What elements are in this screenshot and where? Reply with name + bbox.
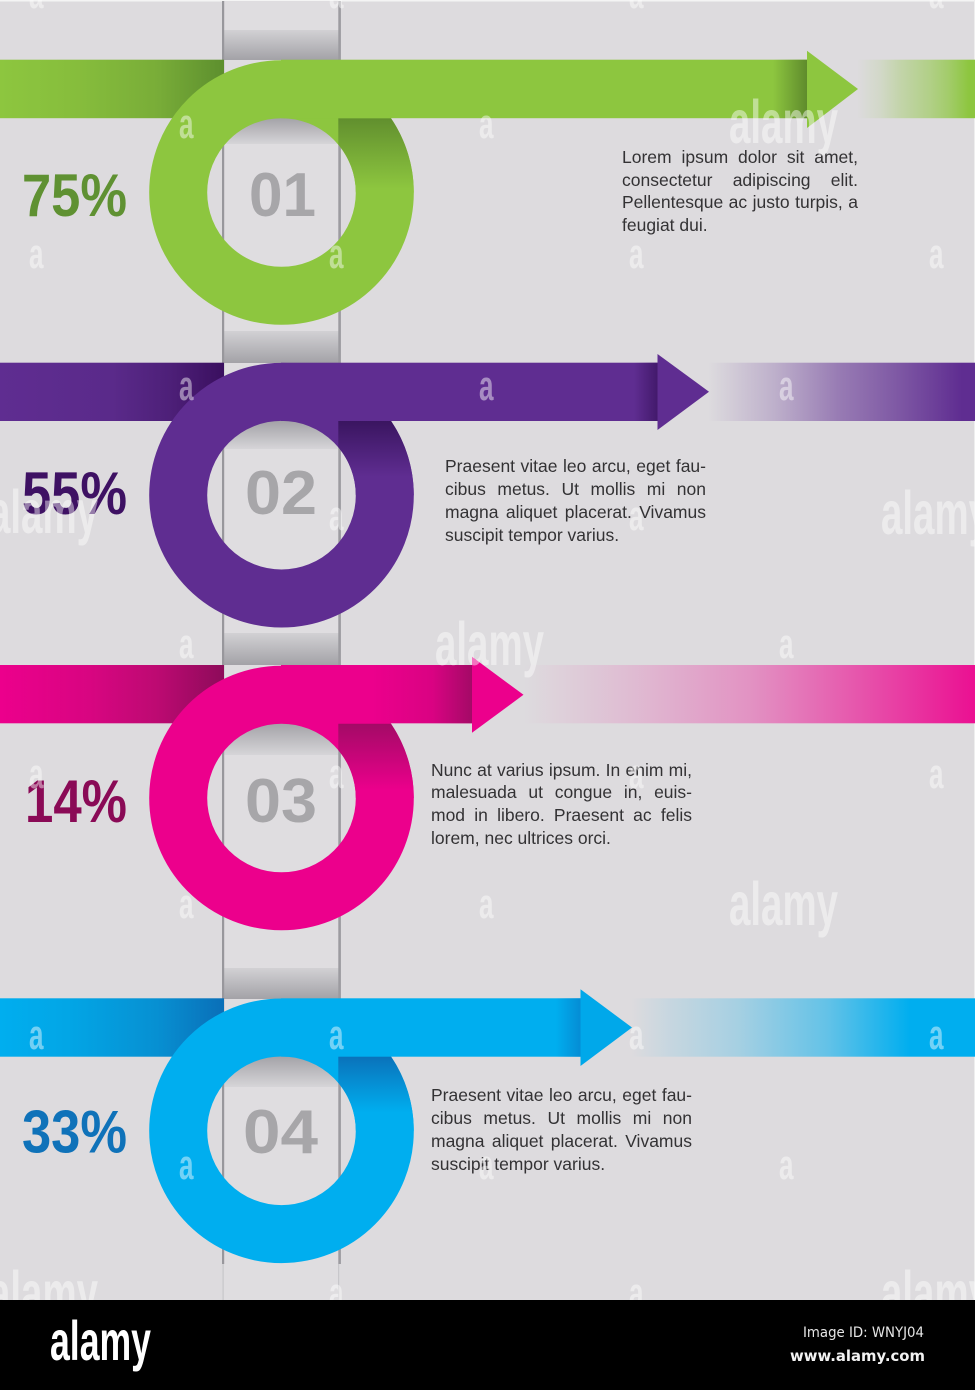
section 02: purple ring arrow — [0, 354, 975, 598]
watermarks: a — [179, 100, 194, 147]
watermarks: a — [929, 1011, 944, 1058]
image id: Image ID: WNYJ04 — [803, 1325, 924, 1341]
description: lorem, nec ultrices orci. — [431, 828, 611, 848]
description: suscipit tempor varius. — [431, 1154, 605, 1174]
percentage: 33% — [22, 1098, 127, 1166]
description: cibus metus. Ut mollis mi non — [445, 479, 706, 499]
watermarks: a — [629, 1011, 644, 1058]
left band — [0, 998, 224, 1057]
watermarks: a — [29, 230, 44, 277]
watermarks: a — [179, 1141, 194, 1188]
description: magna aliquet placerat. Vivamus — [431, 1131, 692, 1151]
description: Praesent vitae leo arcu, eget fau- — [431, 1085, 692, 1105]
left band — [0, 60, 224, 118]
watermarks: a — [629, 230, 644, 277]
watermarks: a — [179, 880, 194, 927]
description: feugiat dui. — [622, 215, 708, 235]
watermarks: a — [929, 230, 944, 277]
watermarks: a — [329, 1269, 344, 1316]
description: consectetur adipiscing elit. — [622, 170, 858, 190]
watermarks: a — [779, 620, 794, 667]
description — [431, 1084, 696, 1179]
watermarks: a — [479, 880, 494, 927]
footer logo: alamy — [50, 1309, 151, 1372]
arrow — [281, 657, 975, 733]
website: www.alamy.com — [790, 1347, 925, 1365]
watermarks: a — [329, 230, 344, 277]
ring — [178, 392, 385, 598]
watermarks: alamy — [435, 610, 544, 678]
ring shadow — [338, 1056, 414, 1131]
description: Praesent vitae leo arcu, eget fau- — [445, 456, 706, 476]
ring — [178, 695, 385, 901]
number: 01 — [249, 161, 316, 230]
watermarks: a — [929, 750, 944, 797]
vertical centre strip — [222, 1, 341, 1300]
watermarks: a — [629, 750, 644, 797]
watermarks: a — [479, 100, 494, 147]
description — [622, 146, 862, 241]
description: Nunc at varius ipsum. In enim mi, — [431, 760, 692, 780]
footer bar — [0, 1300, 975, 1390]
number: 02 — [245, 459, 317, 528]
watermarks: a — [29, 1011, 44, 1058]
description: suscipit tempor varius. — [445, 525, 619, 545]
watermarks: a — [779, 1141, 794, 1188]
number: 03 — [245, 767, 317, 836]
watermarks: alamy — [729, 88, 838, 156]
description — [431, 759, 696, 854]
description: Lorem ipsum dolor sit amet, — [622, 147, 858, 167]
ring — [178, 1028, 385, 1234]
description: Pellentesque ac justo turpis, a — [622, 192, 858, 212]
ring shadow — [338, 421, 414, 495]
watermarks: a — [179, 362, 194, 409]
watermarks: a — [179, 620, 194, 667]
watermarks: a — [479, 1141, 494, 1188]
description — [445, 455, 710, 550]
description: malesuada ut congue in, euis- — [431, 782, 692, 802]
section 01: green ring arrow — [0, 51, 975, 296]
watermarks: a — [479, 362, 494, 409]
watermarks: a — [779, 362, 794, 409]
watermarks: a — [629, 1269, 644, 1316]
watermarks: a — [629, 492, 644, 539]
watermarks: a — [329, 1011, 344, 1058]
description: cibus metus. Ut mollis mi non — [431, 1108, 692, 1128]
watermarks: a — [329, 492, 344, 539]
description: magna aliquet placerat. Vivamus — [445, 502, 706, 522]
arrow — [281, 354, 975, 430]
percentage: 14% — [25, 768, 127, 835]
percentage: 75% — [22, 162, 127, 229]
percentage: 55% — [22, 460, 127, 527]
left band — [0, 363, 224, 421]
description: mod in libero. Praesent ac felis — [431, 805, 692, 825]
ring shadow — [338, 724, 414, 798]
number: 04 — [243, 1098, 319, 1167]
arrow — [281, 989, 975, 1066]
left band — [0, 665, 224, 723]
watermarks: alamy — [729, 870, 838, 938]
ring shadow — [338, 118, 414, 192]
watermarks: a — [29, 750, 44, 797]
section 04: blue ring arrow — [0, 989, 975, 1234]
ring — [178, 89, 385, 296]
section 03: magenta ring arrow — [0, 657, 975, 901]
watermarks: a — [329, 750, 344, 797]
arrow — [281, 51, 975, 128]
